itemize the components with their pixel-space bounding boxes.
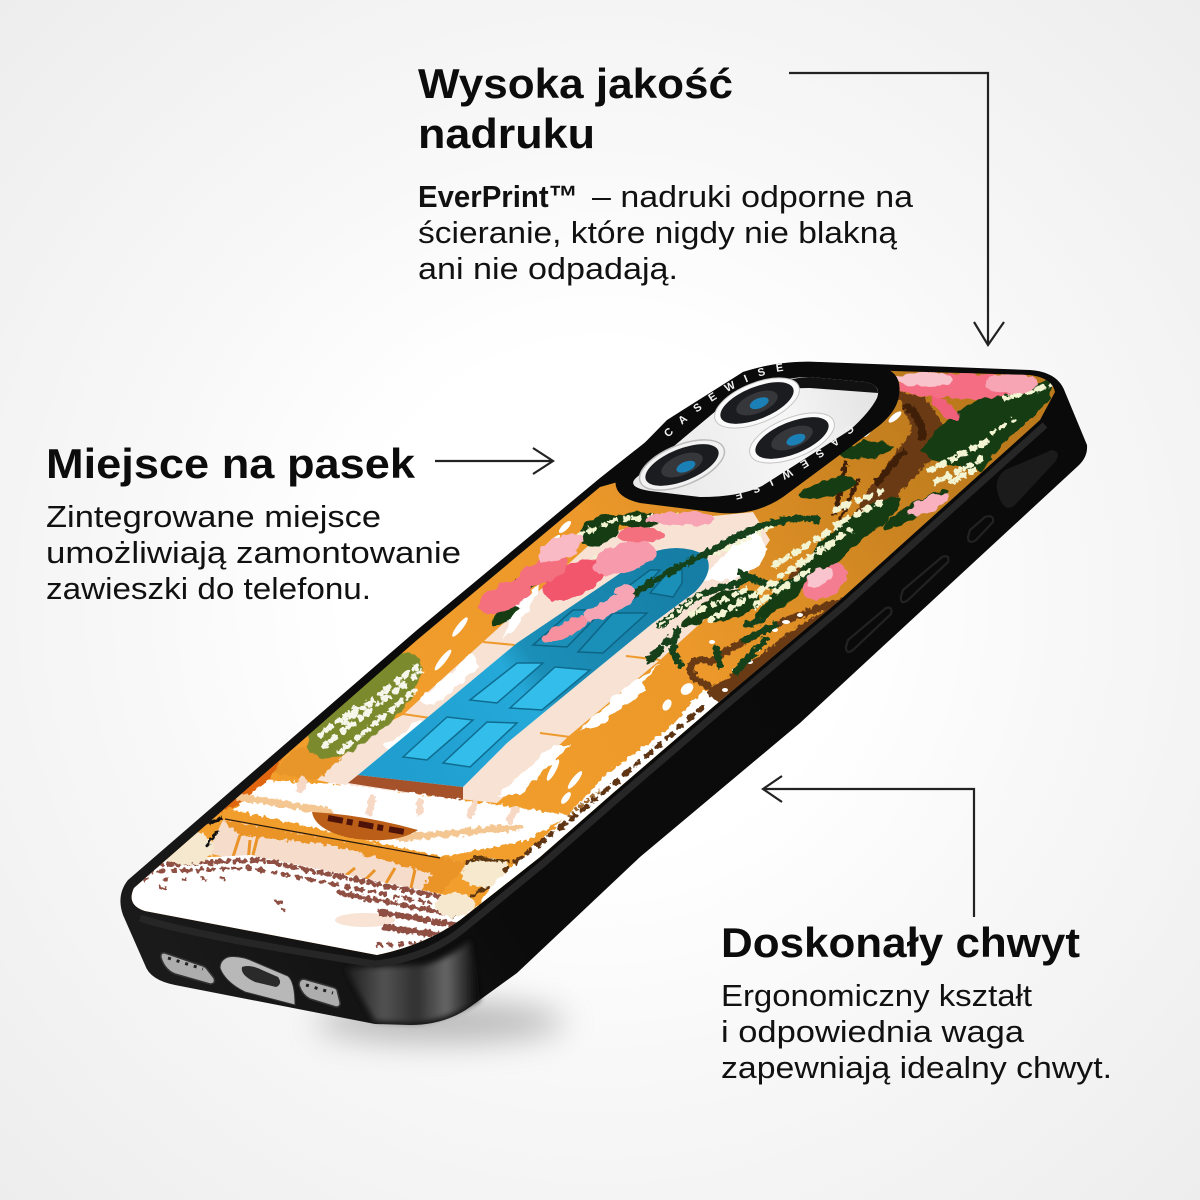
lower door panels [403,663,590,767]
speaker grille right [299,979,340,1007]
body text: i odpowiednia waga [721,1014,1025,1049]
ground [132,855,472,955]
body text: – nadruki odporne na [592,179,914,214]
body text: zawieszki do telefonu. [46,571,371,606]
side buttons [846,516,993,652]
wall highlights [433,410,903,805]
body text: Ergonomiczny kształt [721,978,1032,1013]
camera bump [616,362,900,514]
speaker grille left [161,953,214,984]
body text [721,978,1112,1085]
glass window [633,377,878,497]
dark trunk shade [835,405,922,520]
orange red accent [219,756,284,814]
side strap slot [997,450,1058,508]
heading [418,60,733,157]
bump frame [616,362,900,513]
body text: ani nie odpadają. [418,251,678,286]
pebbles [145,860,455,945]
charging port [220,957,295,1005]
upper door panels [533,565,682,653]
step dark edge [225,819,440,858]
upper step [233,780,570,857]
heading: Doskonały chwyt [721,919,1080,966]
left orange block [274,746,345,780]
shadow under phone [315,1002,565,1042]
step orange [223,820,472,893]
door threshold [348,775,463,801]
wall seam lines [403,642,660,737]
olive plant [306,652,424,760]
body text: zapewniają idealny chwyt. [721,1050,1112,1085]
callout: strap slot [46,440,553,606]
plant blossoms [320,665,420,752]
heading: nadruku [418,110,595,157]
body text [418,179,914,286]
pink blossoms [474,372,1038,647]
basket shade [328,818,405,832]
blue door [358,548,709,787]
corner highlight [345,940,480,1023]
rim sheen [140,425,1045,964]
artwork panel [132,370,1055,955]
lens right [743,403,841,473]
brand text top: CASEWISE [664,363,784,436]
step shading [240,780,520,838]
arrow to phone side [763,776,974,917]
white wall dabs [385,528,768,795]
arrow to strap slot [435,448,553,474]
brand text bottom: CASEWISE [736,428,854,500]
upper trunk [788,391,942,580]
lens left [633,430,731,500]
top inner shadow [762,377,878,393]
heading: Wysoka jakość [418,60,733,107]
orange wall [132,370,1055,955]
step streaks [232,835,415,892]
body text: Zintegrowane miejsce [46,499,381,534]
body text [46,499,461,606]
green vines [630,518,820,672]
stones [160,818,512,917]
door surround [317,512,770,803]
heading: Miejsce na pasek [46,440,416,487]
callout: grip [721,776,1112,1085]
phone case [120,362,1088,1028]
arrow to case print [789,73,1004,345]
lens top [708,368,806,438]
body text: ścieranie, które nigdy nie blakną [418,215,898,250]
case body [120,362,1087,1025]
lower trunk [690,600,845,708]
strip pebbles [502,705,704,874]
wall pebble strip [470,690,730,915]
basket [312,812,418,840]
ground tint [335,913,395,927]
trunk white dots [709,613,803,692]
body text: EverPrint™ [418,179,578,214]
cream blossoms [576,383,1054,664]
callout: print quality [418,60,1004,345]
dark green foliage [488,380,1052,632]
lower step [207,820,472,895]
body text: umożliwiają zamontowanie [46,535,461,570]
